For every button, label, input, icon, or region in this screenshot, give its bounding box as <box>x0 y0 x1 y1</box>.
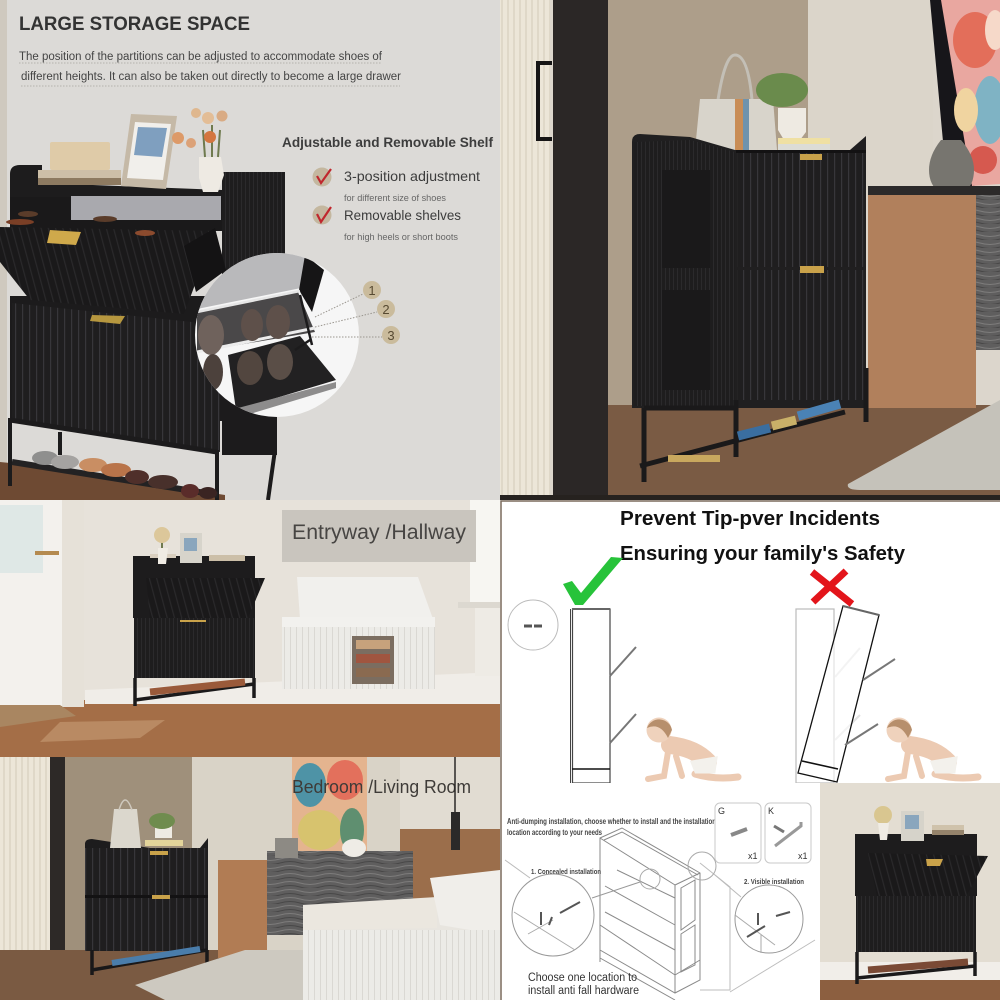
white door <box>0 500 84 707</box>
heading: prevent tip-over incidents <box>620 508 906 565</box>
panel: cabinet room view <box>820 783 1000 1000</box>
callout: visible installation <box>688 852 804 953</box>
feature: 3-position adjustment: for different size of shoes <box>344 193 446 204</box>
text block: partitions description: different heights. It can also be taken out directly to become a large drawer <box>21 71 401 83</box>
window and radiator <box>458 500 500 676</box>
hardware G <box>715 803 761 863</box>
label: bedroom living room: Bedroom /Living Room <box>292 777 471 797</box>
text block: choose location <box>528 972 639 997</box>
heading: prevent tip-over incidents: Ensuring your family's Safety <box>620 543 906 565</box>
text block: choose location: Choose one location to <box>528 972 637 984</box>
callout: concealed installation: 1. Concealed installation <box>531 867 601 876</box>
decor on cabinet top <box>38 108 228 192</box>
panel: prevent tip-over <box>500 500 1000 784</box>
text block: installation note: Anti-dumping installation, choose whether to install and the installation <box>507 817 716 826</box>
floor mat <box>0 705 76 727</box>
white storage bench <box>282 577 435 689</box>
callout numbers 1 2 3: 3 <box>387 328 395 343</box>
hardware G: G <box>718 806 725 816</box>
feature: removable shelves: Removable shelves <box>344 207 461 223</box>
diagram: tipping cabinet <box>796 606 895 783</box>
text block: installation note <box>507 817 716 837</box>
hardware K <box>765 803 811 863</box>
label: entryway hallway: Entryway /Hallway <box>292 521 466 544</box>
panel: bedroom living room <box>0 757 500 1000</box>
white benches <box>303 870 500 1000</box>
magnified shelf detail <box>190 250 365 420</box>
silver vase <box>929 140 974 186</box>
black cabinet <box>632 134 866 482</box>
tote bag and decor <box>695 55 830 150</box>
baby crawling left <box>646 718 738 779</box>
hardware K: x1 <box>798 851 808 861</box>
gold handle lower <box>90 315 125 324</box>
rug <box>848 400 1000 490</box>
callout numbers 1 2 3: 1 <box>368 283 376 298</box>
callout numbers 1 2 3 <box>312 281 400 344</box>
cabinet line drawing <box>600 828 815 1000</box>
heading: large storage space: LARGE STORAGE SPACE <box>19 14 250 35</box>
door handle <box>538 63 552 139</box>
black cabinet with tilted door <box>133 527 265 706</box>
black cabinet <box>85 800 208 975</box>
heading: prevent tip-over incidents: Prevent Tip-pver Incidents <box>620 508 880 530</box>
shoe cabinet with open door <box>0 165 285 500</box>
painting <box>292 757 367 857</box>
baby crawling right <box>886 718 978 779</box>
label: entryway hallway <box>282 510 476 562</box>
text block: partitions description: The position of the partitions can be adjusted to accommodate shoes of <box>19 51 383 63</box>
heading: adjustable shelf: Adjustable and Removable Shelf <box>282 135 494 150</box>
sideboard <box>218 838 413 958</box>
panel: large storage space <box>0 0 500 500</box>
hardware G: x1 <box>748 851 758 861</box>
text block: choose location: install anti fall hardware <box>528 985 639 997</box>
decor on cabinet top <box>874 806 964 841</box>
icon: green check <box>563 557 623 605</box>
rug <box>135 950 303 1000</box>
feature: 3-position adjustment: 3-position adjustment <box>344 168 480 184</box>
icon: red cross <box>812 571 852 604</box>
gold handle upper <box>47 230 81 245</box>
panel: entryway hallway <box>0 500 500 757</box>
hardware K: K <box>768 806 774 816</box>
black cabinet with tilted door <box>855 834 988 984</box>
feature: 3-position adjustment <box>312 168 480 204</box>
callout: concealed installation <box>505 860 660 956</box>
text block: partitions description <box>19 51 401 86</box>
panel: closed cabinet in room <box>500 0 1000 500</box>
pendant lamp <box>451 757 460 850</box>
callout numbers 1 2 3: 2 <box>382 302 390 317</box>
panel: anti-dumping installation <box>500 783 820 1000</box>
callout: visible installation: 2. Visible installation <box>744 877 804 886</box>
feature: removable shelves: for high heels or short boots <box>344 232 458 243</box>
text block: installation note: location according to your needs <box>507 828 602 837</box>
diagram: anchored cabinet <box>508 600 636 784</box>
feature: removable shelves <box>312 206 461 243</box>
painting <box>930 0 1000 196</box>
sideboard <box>868 186 1000 408</box>
